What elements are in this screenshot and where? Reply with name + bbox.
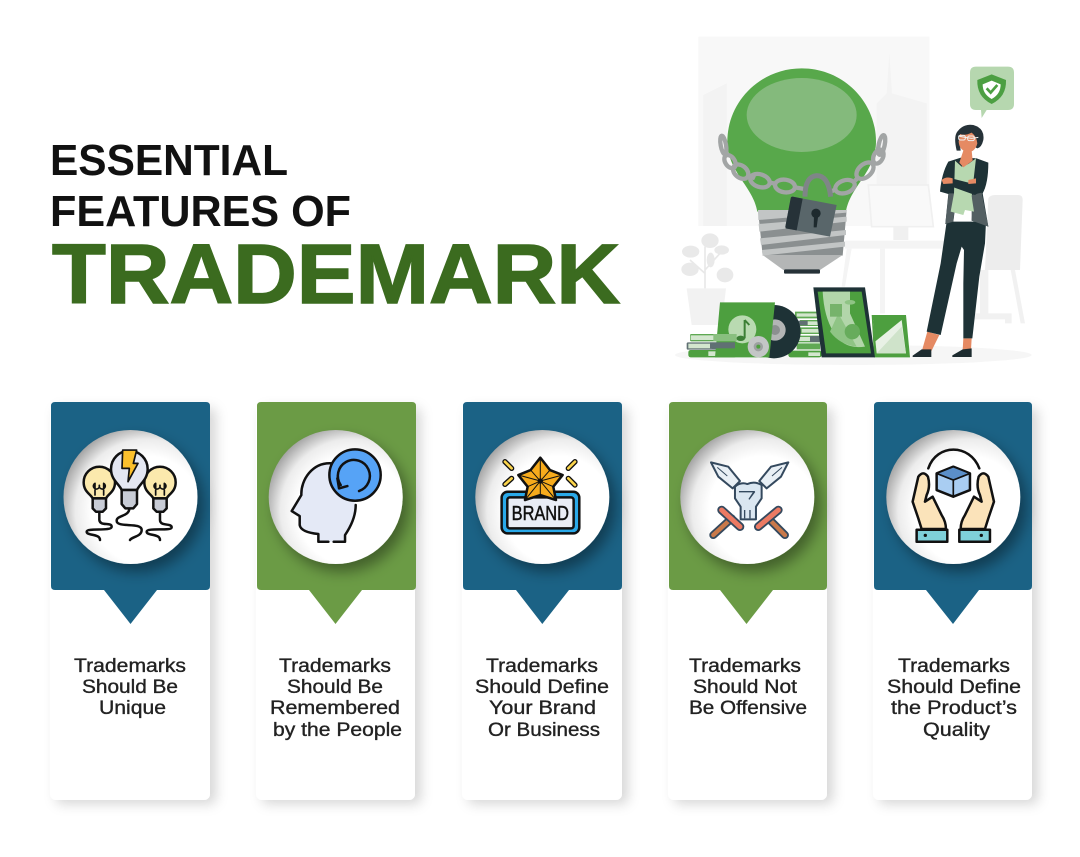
text: Should Be xyxy=(82,677,178,698)
card 4: not offensive xyxy=(668,402,827,800)
text: Be Offensive xyxy=(689,698,807,719)
books and albums xyxy=(687,287,910,358)
text xyxy=(475,656,609,741)
banner xyxy=(463,402,622,624)
icon: brand star sign: BRAND xyxy=(512,503,569,525)
speech badge: shield check xyxy=(970,67,1014,118)
text: Your Brand xyxy=(489,698,596,719)
banner xyxy=(669,402,827,624)
card body xyxy=(256,404,415,800)
text: the Product’s xyxy=(891,698,1017,719)
card body xyxy=(50,404,210,800)
icon disc xyxy=(680,430,814,564)
chain xyxy=(719,135,887,196)
text: Should Not xyxy=(693,677,798,698)
text: Trademarks xyxy=(898,656,1010,677)
illustration: locked bulb and businesswoman xyxy=(675,37,1032,365)
card body xyxy=(873,404,1032,800)
text xyxy=(74,656,186,719)
card 2: remembered xyxy=(256,402,416,800)
title xyxy=(50,137,620,321)
text xyxy=(689,656,807,719)
heading: features of: FEATURES OF xyxy=(50,188,351,236)
text: Unique xyxy=(99,698,166,719)
text: Trademarks xyxy=(279,656,391,677)
card 5: quality xyxy=(873,402,1032,800)
heading: essential: ESSENTIAL xyxy=(50,137,288,185)
heading: trademark: TRADEMARK xyxy=(52,227,620,321)
text: Or Business xyxy=(488,720,600,741)
text: Should Define xyxy=(887,677,1021,698)
background: office scene xyxy=(675,37,1032,365)
text xyxy=(887,656,1021,741)
icon disc xyxy=(64,430,198,564)
icon: three light bulbs xyxy=(84,450,176,540)
text: Quality xyxy=(923,720,991,741)
woman xyxy=(913,125,988,357)
icon disc xyxy=(269,430,403,564)
icon: brand star sign xyxy=(502,458,579,533)
card 1: unique xyxy=(50,402,210,800)
text: Trademarks xyxy=(689,656,801,677)
banner xyxy=(51,402,210,624)
padlock xyxy=(785,176,837,237)
bulb xyxy=(727,68,876,274)
text: Trademarks xyxy=(486,656,598,677)
banner xyxy=(257,402,416,624)
text: Should Define xyxy=(475,677,609,698)
card body xyxy=(668,404,827,800)
text: Remembered xyxy=(270,698,400,719)
icon: crossed swords and fist xyxy=(711,462,788,535)
text: Trademarks xyxy=(74,656,186,677)
text: by the People xyxy=(273,720,402,741)
icon: head with refresh xyxy=(292,449,381,542)
banner xyxy=(874,402,1032,624)
text: Should Be xyxy=(287,677,383,698)
icon disc xyxy=(886,430,1020,564)
card 3: brand xyxy=(462,402,622,800)
icon: hands holding box xyxy=(913,450,994,542)
card body xyxy=(462,404,622,800)
text xyxy=(270,656,402,741)
icon disc xyxy=(475,430,609,564)
